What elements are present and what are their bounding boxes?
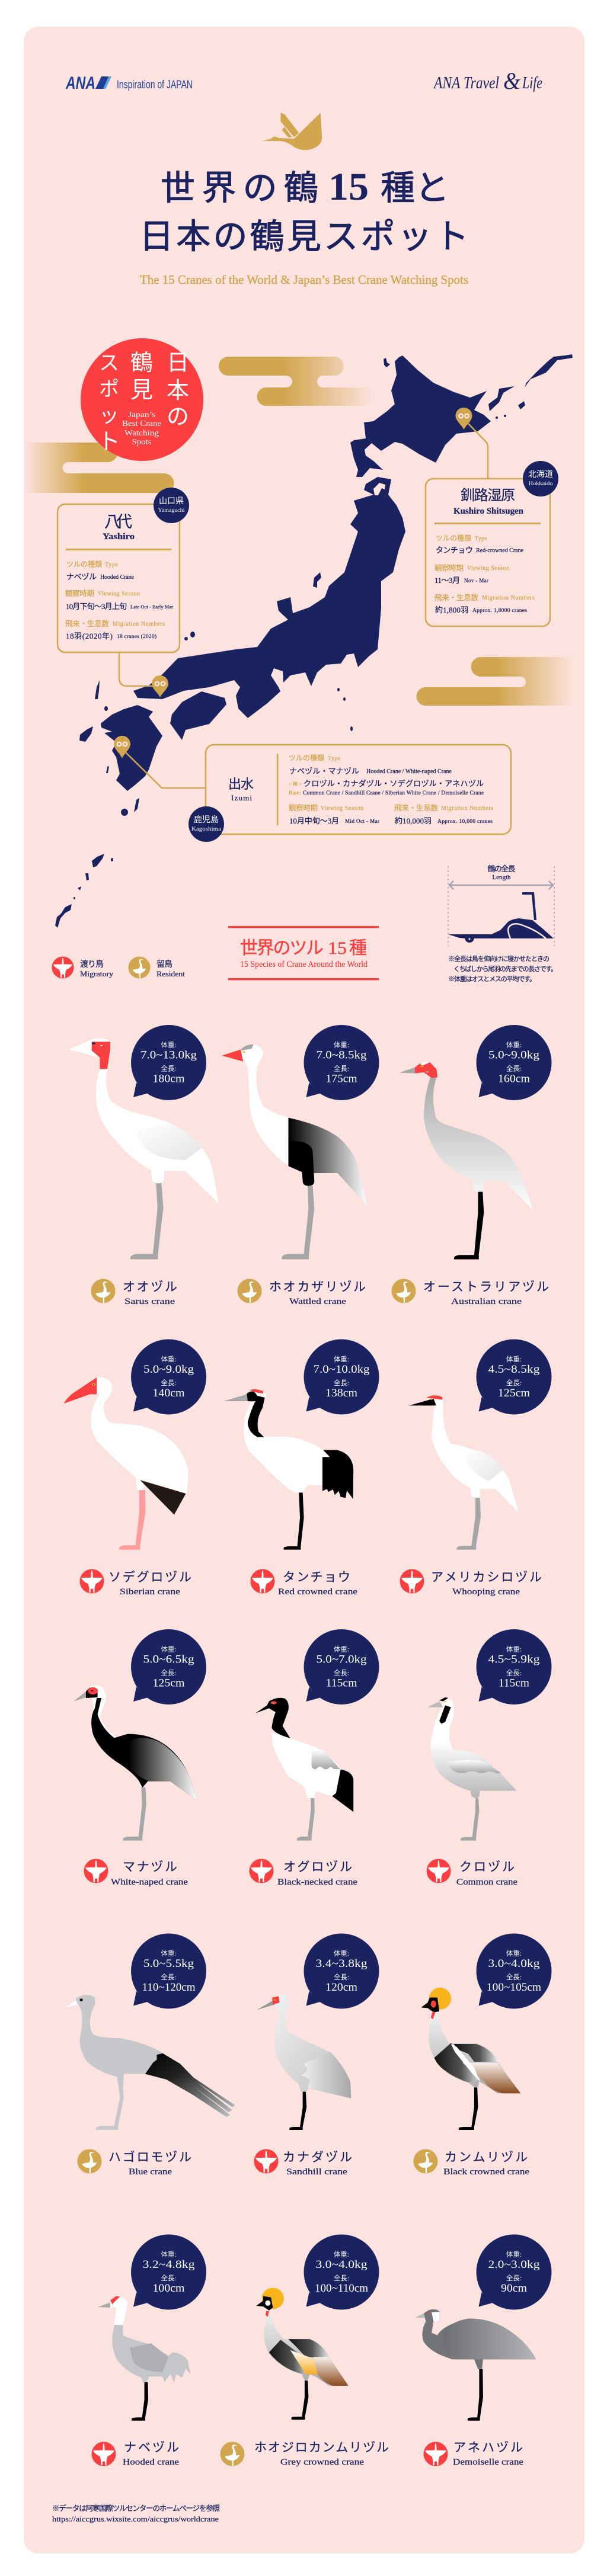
bubble: Grey crowned crane: 体重: — [334, 2250, 349, 2258]
label: Black crowned crane — [414, 2149, 529, 2177]
card: Yashiro: Viewing Season — [98, 591, 140, 597]
bubble: Black-necked crane: 5.0~7.0kg — [317, 1653, 367, 1666]
map: Mutsu Bay — [373, 483, 385, 495]
label: Sandhill crane — [254, 2149, 352, 2177]
label: Red crowned crane: タンチョウ — [283, 1570, 350, 1584]
card: Yashiro: ナベヅル — [66, 572, 97, 581]
badge: Hokkaido: Hokkaido — [529, 481, 553, 487]
bubble: Sarus crane — [131, 1025, 206, 1100]
card: Izumi: Approx. 10,000 cranes — [437, 819, 493, 825]
bubble: Australian crane: 体重: — [506, 1040, 522, 1049]
title — [139, 165, 469, 256]
note: length and weight — [448, 954, 557, 983]
card: Yashiro: 八代 — [104, 513, 132, 531]
label: Siberian crane — [79, 1569, 191, 1597]
label: Grey crowned crane: ホオジロカンムリヅル — [254, 2440, 389, 2455]
card: Izumi: 飛来・生息数 — [394, 803, 438, 812]
bubble: Sarus crane: 180cm — [153, 1072, 185, 1085]
pin: Yamaguchi — [152, 675, 168, 697]
card: Yashiro: Migration Numbers — [113, 621, 165, 627]
heading: 15 species of crane: 15 — [328, 938, 347, 958]
badge: Japan's best crane watching spots: ト — [98, 430, 120, 454]
card: Kushiro Shitsugen: 観察時期 — [435, 564, 464, 572]
label: Sarus crane — [91, 1279, 177, 1306]
badge: Hokkaido: 北海道 — [528, 470, 553, 479]
bubble: Grey crowned crane: 全長: — [334, 2274, 349, 2282]
bubble: Hooded crane: 100cm — [153, 2282, 185, 2295]
card: Yashiro: 観察時期 — [65, 589, 94, 598]
map: Hokkaido — [350, 355, 491, 477]
bubble: Black-necked crane — [304, 1629, 379, 1704]
card: Izumi: Hooded Crane / White-naped Crane — [366, 768, 452, 775]
card: Izumi: ナベヅル・マナヅル — [289, 767, 359, 776]
card: Izumi: ツルの種類 — [289, 754, 324, 762]
pin: Kagoshima — [114, 736, 130, 758]
bubble: Australian crane: 160cm — [498, 1072, 530, 1085]
bird: Whooping crane — [409, 1395, 519, 1550]
card: Izumi: 10月中旬～3月 — [289, 816, 339, 825]
badge: Japan's best crane watching spots: Spots — [132, 438, 152, 447]
label: Demoiselle crane: Demoiselle crane — [453, 2458, 523, 2467]
heading: 15 species of crane: 種 — [349, 938, 367, 958]
legend: migratory — [52, 956, 114, 979]
bubble: Siberian crane: 140cm — [153, 1387, 185, 1399]
card: Yashiro: Type — [105, 562, 119, 568]
label: Grey crowned crane: Grey crowned crane — [280, 2458, 364, 2467]
card: Kushiro Shitsugen: Nov - Mar — [464, 578, 488, 584]
bubble: Siberian crane — [131, 1339, 206, 1415]
title: 世界の鶴 — [161, 169, 318, 207]
bubble: Demoiselle crane: 90cm — [501, 2282, 527, 2295]
footer: data source: https://aiccgrus.wixsite.com/aiccgrus/worldcrane — [52, 2514, 219, 2523]
card: Izumi — [206, 745, 511, 834]
bubble: Australian crane: 全長: — [506, 1064, 522, 1072]
bubble: Blue crane: 110~120cm — [142, 1981, 196, 1994]
badge: Japan's best crane watching spots: ス — [99, 353, 119, 374]
legend: resident: 留鳥 — [156, 960, 172, 969]
card: Izumi: 出水 — [228, 777, 254, 792]
connector: Yamaguchi — [119, 652, 155, 686]
bubble: Siberian crane: 全長: — [161, 1379, 177, 1387]
badge: Japan's best crane watching spots: ッ — [99, 405, 119, 427]
heading: 15 species of crane: 世界のツル — [240, 938, 324, 958]
bubble: Hooded crane: 3.2~4.8kg — [142, 2258, 195, 2271]
card: Kushiro Shitsugen: 約1,800羽 — [435, 605, 468, 614]
bubble: Whooping crane: 全長: — [506, 1379, 522, 1387]
card: Izumi: 約10,000羽 — [395, 816, 432, 825]
label: Blue crane — [77, 2149, 191, 2177]
diagram: crane length: Length — [492, 874, 511, 881]
legend: migratory: Migratory — [80, 969, 114, 978]
bubble: Black crowned crane — [477, 1934, 551, 2008]
heading: 15 species of crane — [228, 926, 379, 980]
card: Yashiro: 飛来・生息数 — [65, 619, 109, 628]
label: Siberian crane: Siberian crane — [120, 1587, 180, 1597]
bubble: Common crane: 全長: — [506, 1668, 522, 1677]
bubble: Sandhill crane: 全長: — [334, 1973, 349, 1981]
label: White-naped crane: White-naped crane — [111, 1877, 188, 1887]
bubble: Sandhill crane: 120cm — [325, 1981, 357, 1994]
card: Yashiro: 18 cranes (2020) — [117, 633, 156, 640]
map: Shikoku — [170, 691, 226, 740]
bubble: Grey crowned crane — [304, 2235, 379, 2309]
bubble: Wattled crane: 175cm — [326, 1072, 357, 1085]
card: Yashiro — [57, 504, 180, 652]
footer: data source — [52, 2504, 220, 2523]
bubble: Black crowned crane: 3.0~4.0kg — [488, 1957, 540, 1970]
logo: ANA Inspiration of JAPAN: ANA — [65, 73, 95, 93]
legend: migratory: 渡り鳥 — [80, 960, 104, 969]
bubble: Red crowned crane: 138cm — [325, 1387, 357, 1399]
bubble: Sandhill crane: 3.4~3.8kg — [315, 1957, 368, 1970]
title: 日本の鶴見スポット — [139, 217, 469, 256]
bubble: Blue crane: 体重: — [161, 1949, 177, 1957]
badge: Japan's best crane watching spots: 鶴 — [130, 351, 153, 376]
bubble: Whooping crane: 体重: — [506, 1355, 522, 1363]
badge: Yamaguchi: Yamaguchi — [158, 508, 185, 514]
badge: Kagoshima — [189, 806, 224, 842]
label: Black-necked crane — [249, 1859, 357, 1887]
cloud: left — [24, 443, 174, 493]
bird: Common crane — [428, 1697, 517, 1841]
bubble: Red crowned crane: 全長: — [334, 1379, 349, 1387]
card: Yashiro: Hooded Crane — [100, 574, 135, 581]
note: length and weight: ※全長は鳥を仰向けに寝かせたときの — [448, 954, 550, 963]
card: Yashiro: Yashiro — [103, 532, 135, 542]
bubble: Common crane: 体重: — [506, 1645, 522, 1653]
bubble: Red crowned crane: 7.0~10.0kg — [313, 1363, 370, 1376]
card: Izumi: クロヅル・カナダヅル・ソデグロヅル・アネハヅル — [304, 779, 484, 788]
label: Black-necked crane: オグロヅル — [283, 1860, 352, 1874]
card: Kushiro Shitsugen: Approx. 1,8000 cranes — [472, 608, 527, 614]
badge: Japan's best crane watching spots: Japan’s — [128, 411, 155, 419]
heading: 15 species of crane: 15 Species of Crane Around the World — [240, 960, 368, 969]
badge: Japan's best crane watching spots: の — [167, 405, 189, 430]
bubble: Grey crowned crane: 3.0~4.0kg — [315, 2258, 368, 2271]
card: Kushiro Shitsugen — [426, 479, 550, 626]
legend: resident: Resident — [156, 969, 185, 978]
bubble: Hooded crane: 体重: — [161, 2250, 177, 2258]
bird: Sandhill crane — [257, 1995, 351, 2130]
bubble: Demoiselle crane: 2.0~3.0kg — [488, 2258, 540, 2271]
bubble: White-naped crane: 5.0~6.5kg — [143, 1653, 194, 1666]
label: Siberian crane: ソデグロヅル — [108, 1570, 191, 1584]
card: Izumi: Viewing Season — [321, 805, 363, 812]
bubble: Sarus crane: 7.0~13.0kg — [140, 1049, 197, 1062]
label: Red crowned crane: Red crowned crane — [278, 1587, 357, 1597]
card: Kushiro Shitsugen: 釧路湿原 — [461, 488, 515, 504]
badge: Kagoshima: 鹿児島 — [194, 815, 219, 825]
label: Red crowned crane — [250, 1569, 357, 1597]
label: Sarus crane: Sarus crane — [124, 1297, 175, 1306]
card: Izumi: 観察時期 — [289, 804, 318, 812]
label: White-naped crane: マナヅル — [123, 1860, 177, 1874]
bubble: Sandhill crane — [304, 1934, 379, 2008]
card: Izumi: Type — [328, 756, 340, 762]
label: Whooping crane: Whooping crane — [452, 1587, 520, 1597]
bubble: Black crowned crane: 体重: — [506, 1949, 522, 1957]
label: Black crowned crane: Black crowned crane — [443, 2167, 529, 2177]
label: Black-necked crane: Black-necked crane — [277, 1877, 357, 1887]
card: Yashiro: 18羽(2020年) — [66, 632, 113, 640]
bubble: Whooping crane — [477, 1339, 551, 1415]
label: Sandhill crane: カナダヅル — [283, 2150, 352, 2164]
label: Wattled crane — [237, 1279, 366, 1306]
bubble: Blue crane — [131, 1934, 206, 2008]
bubble: Blue crane: 5.0~5.5kg — [143, 1957, 194, 1970]
label: Common crane: Common crane — [456, 1877, 517, 1887]
map of Japan — [55, 354, 573, 928]
label: Black crowned crane: カンムリヅル — [445, 2150, 528, 2164]
label: Wattled crane: ホオカザリヅル — [269, 1280, 366, 1294]
bubble: Australian crane: 5.0~9.0kg — [488, 1049, 540, 1062]
badge: Japan's best crane watching spots: 見 — [130, 378, 153, 403]
card: Kushiro Shitsugen: Viewing Season — [467, 565, 509, 572]
label: Grey crowned crane — [221, 2440, 389, 2467]
card: Kushiro Shitsugen: 飛来・生息数 — [435, 593, 478, 602]
bubble: Red crowned crane: 体重: — [334, 1355, 349, 1363]
badge: Hokkaido — [523, 461, 558, 496]
bubble: Black-necked crane: 115cm — [326, 1677, 357, 1690]
badge: Yamaguchi — [154, 488, 189, 523]
label: Demoiselle crane: アネハヅル — [453, 2440, 523, 2455]
badge: Japan's best crane watching spots: 日 — [167, 351, 189, 376]
bubble: Sandhill crane: 体重: — [334, 1949, 349, 1957]
card: Kushiro Shitsugen: ツルの種類 — [436, 534, 471, 543]
bubble: Black-necked crane: 体重: — [334, 1645, 349, 1653]
bird: Black crowned crane — [421, 1988, 520, 2130]
bubble: Wattled crane: 体重: — [334, 1040, 349, 1049]
bubble: Common crane: 115cm — [499, 1677, 529, 1690]
bubble: Grey crowned crane: 100~110cm — [315, 2282, 368, 2295]
bubble: Wattled crane — [304, 1025, 379, 1100]
label: Australian crane: Australian crane — [451, 1297, 522, 1306]
bubble: Sarus crane: 体重: — [161, 1040, 177, 1049]
bird: Sarus crane — [69, 1038, 219, 1260]
map: small islands — [79, 354, 573, 816]
label: Whooping crane — [400, 1569, 542, 1597]
badge: Japan's best crane watching spots: Watching — [124, 429, 159, 438]
bird: Wattled crane — [222, 1045, 367, 1260]
card: Kushiro Shitsugen: 11～3月 — [435, 576, 460, 585]
bubble: Wattled crane: 全長: — [334, 1064, 349, 1072]
title: 種と — [381, 169, 449, 207]
card: Izumi: Izumi — [231, 793, 252, 802]
note: length and weight: ※体重はオスとメスの平均です。 — [448, 975, 536, 983]
bubble: Australian crane — [477, 1025, 551, 1100]
label: Australian crane: オーストラリアヅル — [423, 1280, 549, 1294]
bird: Australian crane — [400, 1062, 533, 1260]
badge: Yamaguchi: 山口県 — [159, 496, 184, 506]
label: Demoiselle crane — [423, 2440, 523, 2467]
label: White-naped crane — [84, 1859, 188, 1887]
label: Sandhill crane: Sandhill crane — [286, 2167, 347, 2177]
label: Hooded crane: Hooded crane — [123, 2458, 179, 2467]
bubble: Siberian crane: 体重: — [161, 1355, 177, 1363]
bubble: White-naped crane: 全長: — [161, 1668, 177, 1677]
card: Kushiro Shitsugen: タンチョウ — [436, 546, 473, 555]
bird: Black-necked crane — [255, 1698, 353, 1841]
logo: ANA Inspiration of JAPAN: Inspiration of JAPAN — [117, 79, 193, 91]
subtitle: The 15 Cranes of the World & Japan’s Best Crane Watching Spots — [140, 273, 468, 287]
label: Hooded crane — [91, 2440, 179, 2467]
map: Ryukyu islands — [55, 854, 113, 928]
bubble: Black crowned crane: 100~105cm — [487, 1981, 541, 1994]
bubble: Whooping crane: 125cm — [498, 1387, 530, 1399]
connector: Kagoshima — [126, 752, 206, 788]
diagram: crane length — [448, 864, 554, 946]
bubble: Demoiselle crane — [477, 2235, 551, 2309]
label: Whooping crane: アメリカシロヅル — [431, 1570, 542, 1584]
label: Australian crane — [391, 1279, 549, 1306]
bubble: Whooping crane: 4.5~8.5kg — [488, 1363, 540, 1376]
bubble: White-naped crane: 体重: — [161, 1645, 177, 1653]
bubble: White-naped crane: 125cm — [153, 1677, 185, 1690]
cloud: right — [416, 657, 574, 706]
bird: Hooded crane — [98, 2296, 190, 2421]
bubble: Siberian crane: 5.0~9.0kg — [143, 1363, 194, 1376]
bubble: Demoiselle crane: 全長: — [506, 2274, 522, 2282]
card: Izumi: Common Crane / Sandhill Crane / Siberian White Crane / Demoiselle Crane — [303, 790, 484, 796]
badge: Kagoshima: Kagoshima — [191, 826, 222, 832]
bubble: White-naped crane — [131, 1629, 206, 1704]
pin: Hokkaido — [455, 408, 472, 430]
bird: Demoiselle crane — [415, 2309, 536, 2421]
diagram: crane length: 鶴の全長 — [487, 864, 516, 873]
bubble: Demoiselle crane: 体重: — [506, 2250, 522, 2258]
bird: Red crowned crane — [223, 1389, 353, 1550]
bubble: Blue crane: 全長: — [161, 1973, 177, 1981]
badge: Japan's best crane watching spots — [81, 338, 203, 461]
bubble: Black-necked crane: 全長: — [334, 1668, 349, 1677]
card: Kushiro Shitsugen: Migration Numbers — [482, 595, 535, 601]
card: Izumi: Migration Numbers — [441, 805, 493, 812]
card: Izumi: Mid Oct - Mar — [345, 818, 379, 824]
badge: Japan's best crane watching spots: ポ — [99, 378, 119, 401]
logo: ANA Travel and Life — [433, 68, 542, 94]
label: Common crane: クロヅル — [459, 1860, 515, 1874]
badge: Japan's best crane watching spots: 本 — [167, 379, 189, 403]
bubble: Common crane — [477, 1629, 551, 1704]
logo: ANA Travel and Life: ANA Travel — [433, 74, 499, 92]
logo: ANA Travel and Life: & — [503, 68, 520, 94]
bird: Blue crane — [66, 1995, 235, 2130]
label: Hooded crane: ナベヅル — [124, 2440, 179, 2455]
bird: Grey crowned crane — [256, 2288, 349, 2420]
card: Yashiro: ツルの種類 — [66, 560, 102, 569]
icon: gold crane logo — [261, 113, 322, 150]
map: Kyushu — [101, 705, 162, 791]
connector: Hokkaido — [468, 424, 488, 479]
title: 15 — [328, 165, 369, 209]
bubble: Wattled crane: 7.0~8.5kg — [317, 1049, 367, 1062]
label: Common crane — [427, 1859, 517, 1887]
note: length and weight: くちばしから尾羽の先までの長さです。 — [453, 965, 557, 973]
card: Yashiro: 10月下旬～3月上旬 — [66, 602, 127, 611]
bubble: Common crane: 4.5~5.9kg — [488, 1653, 540, 1666]
label: Wattled crane: Wattled crane — [289, 1297, 346, 1306]
card: Kushiro Shitsugen: Type — [475, 536, 488, 542]
card: Izumi: <稀> — [289, 781, 302, 787]
bubble: Black crowned crane: 全長: — [506, 1973, 522, 1981]
footer: data source: ※データは阿寒国際ツルセンターのホームページを参照 — [52, 2504, 220, 2513]
bubble: Red crowned crane — [304, 1339, 379, 1415]
card: Izumi: Rare: — [289, 790, 301, 796]
logo: ANA Travel and Life: Life — [522, 74, 542, 92]
bird: White-naped crane — [74, 1686, 197, 1841]
card: Yashiro: Late Oct - Early Mar — [130, 604, 173, 610]
label: Blue crane: Blue crane — [129, 2167, 172, 2177]
legend: resident — [128, 956, 185, 979]
card: Kushiro Shitsugen: Red-crowned Crane — [476, 547, 524, 554]
bubble: Sarus crane: 全長: — [161, 1064, 177, 1072]
cloud: top centre — [219, 357, 372, 406]
bubble: Hooded crane: 全長: — [161, 2274, 177, 2282]
bird: Siberian crane — [64, 1377, 189, 1550]
logo: ANA Inspiration of JAPAN — [65, 73, 193, 93]
label: Sarus crane: オオヅル — [123, 1280, 177, 1294]
badge: Japan's best crane watching spots: Best Crane — [122, 419, 161, 428]
bubble: Hooded crane — [131, 2235, 206, 2309]
label: Blue crane: ハゴロモヅル — [108, 2150, 191, 2164]
map: Honshu — [133, 477, 405, 718]
card: Kushiro Shitsugen: Kushiro Shitsugen — [453, 507, 524, 516]
